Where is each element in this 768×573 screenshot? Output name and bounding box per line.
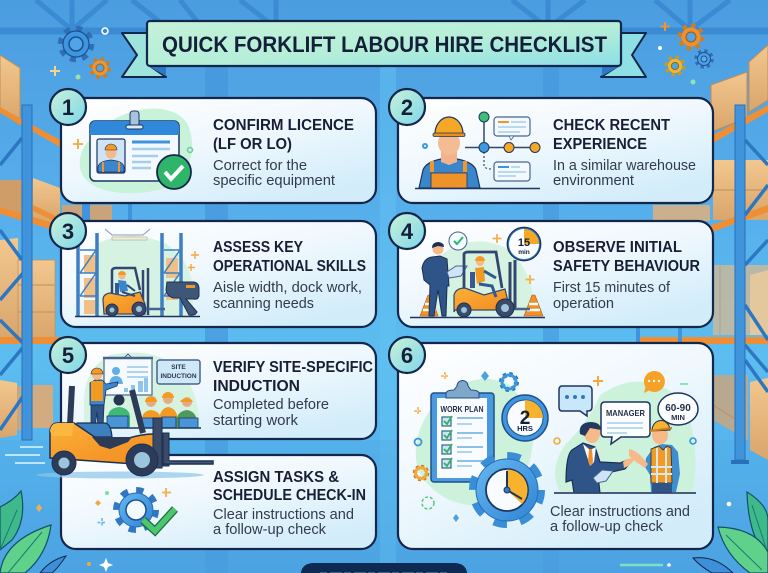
body text: environment (553, 173, 634, 189)
badge 2 (389, 89, 425, 125)
icon: supervisor, forklift, timer: min (518, 249, 530, 256)
heading: OPERATIONAL SKILLS (213, 258, 366, 275)
body text (213, 158, 335, 189)
panel: assign tasks and schedule check-in (61, 455, 376, 549)
panel 4: observe safety behaviour (398, 221, 713, 327)
badge 4: 4 (401, 219, 414, 244)
speech bubble: 60-90 min: 60-90 (665, 403, 691, 414)
badge 5 (50, 337, 86, 373)
banner plate (147, 21, 621, 66)
worker figure (629, 421, 680, 493)
heading: CONFIRM LICENCE (213, 117, 354, 134)
body text (213, 397, 329, 429)
body text (213, 507, 354, 538)
heading: ASSESS KEY (213, 239, 304, 256)
title text: QUICK FORKLIFT LABOUR HIRE CHECKLIST (162, 32, 608, 57)
panel 6: work plan and check-in (398, 343, 713, 549)
clipboard: work plan (431, 381, 494, 482)
badge 6: 6 (401, 343, 413, 368)
icon: induction session (84, 352, 201, 428)
leaves bottom-left (0, 491, 113, 573)
body text: First 15 minutes of (553, 280, 671, 296)
label: site induction (157, 360, 200, 384)
large forklift (5, 386, 213, 478)
heading: SAFETY BEHAVIOUR (553, 258, 700, 275)
heading (213, 469, 366, 504)
speech bubble: dots (559, 386, 592, 416)
left warehouse shelves (0, 55, 132, 440)
title banner (122, 21, 646, 77)
icon: worker and timeline (415, 112, 540, 188)
ribbon tails (122, 33, 646, 77)
speech bubble: 60-90 min (658, 393, 698, 425)
heading: (LF OR LO) (213, 136, 292, 153)
body text: In a similar warehouse (553, 158, 696, 174)
body text (213, 280, 362, 312)
large gear clock (474, 457, 540, 523)
badge 2: 2 (401, 95, 413, 120)
panel 1: confirm licence (61, 98, 376, 203)
body text: operation (553, 296, 614, 312)
body text: starting work (213, 413, 299, 429)
body text (553, 280, 671, 312)
icon: racks, forklift and scanner (75, 229, 200, 316)
badge 3 (50, 213, 86, 249)
speech bubble: orange (644, 371, 665, 393)
label: site induction: SITE (171, 364, 186, 371)
heading: SCHEDULE CHECK-IN (213, 487, 366, 504)
heading: OBSERVE INITIAL (553, 239, 682, 256)
heading (213, 359, 373, 395)
body text: Completed before (213, 397, 329, 413)
heading: EXPERIENCE (553, 136, 647, 153)
badge 1: 1 (62, 95, 74, 120)
heading: CHECK RECENT (553, 117, 670, 134)
body text: a follow-up check (213, 522, 327, 538)
leaves bottom-right (620, 492, 768, 573)
body text: specific equipment (213, 173, 335, 189)
icon: supervisor, forklift, timer (410, 228, 545, 318)
body text (550, 504, 690, 535)
small clock: 2 hrs: 2 (520, 408, 530, 429)
decorative gears top-left (50, 28, 108, 80)
small clock: 2 hrs: HRS (517, 424, 533, 433)
speech bubble: manager: MANAGER (606, 408, 645, 418)
body text: a follow-up check (550, 519, 664, 535)
badge 6 (389, 337, 425, 373)
small clock: 2 hrs (502, 395, 548, 441)
heading (553, 117, 670, 153)
icon: licence card (73, 109, 192, 193)
body text: Clear instructions and (550, 504, 690, 520)
blobs (416, 379, 696, 506)
label: site induction: INDUCTION (160, 373, 197, 380)
badge 4 (389, 213, 425, 249)
body text: scanning needs (213, 296, 314, 312)
footer pill (301, 563, 467, 573)
manager figure (566, 422, 635, 493)
icon: gear with check mark (95, 488, 175, 531)
badge 3: 3 (62, 219, 74, 244)
heading: INDUCTION (213, 378, 300, 395)
panel 5: verify site induction (61, 343, 376, 439)
speech bubble: manager (601, 402, 650, 444)
clipboard: work plan: WORK PLAN (440, 404, 484, 414)
heading (213, 239, 366, 275)
right warehouse shelves (636, 45, 768, 464)
body text: Correct for the (213, 158, 307, 174)
speech bubble: 60-90 min: MIN (671, 413, 685, 422)
panel 3: assess operational skills (61, 221, 376, 327)
badge 1 (50, 89, 86, 125)
body text: Aisle width, dock work, (213, 280, 362, 296)
decorative sparkles and small gears (414, 371, 696, 522)
body text (553, 158, 696, 189)
heading (553, 239, 700, 275)
decorative gears top-right (658, 22, 712, 84)
heading: ASSIGN TASKS & (213, 469, 339, 486)
body text: Clear instructions and (213, 507, 354, 523)
panel 2: check recent experience (398, 98, 713, 203)
badge 5: 5 (62, 343, 74, 368)
heading: VERIFY SITE-SPECIFIC (213, 359, 373, 376)
heading (213, 117, 354, 153)
icon: supervisor, forklift, timer: 15 (518, 237, 530, 249)
